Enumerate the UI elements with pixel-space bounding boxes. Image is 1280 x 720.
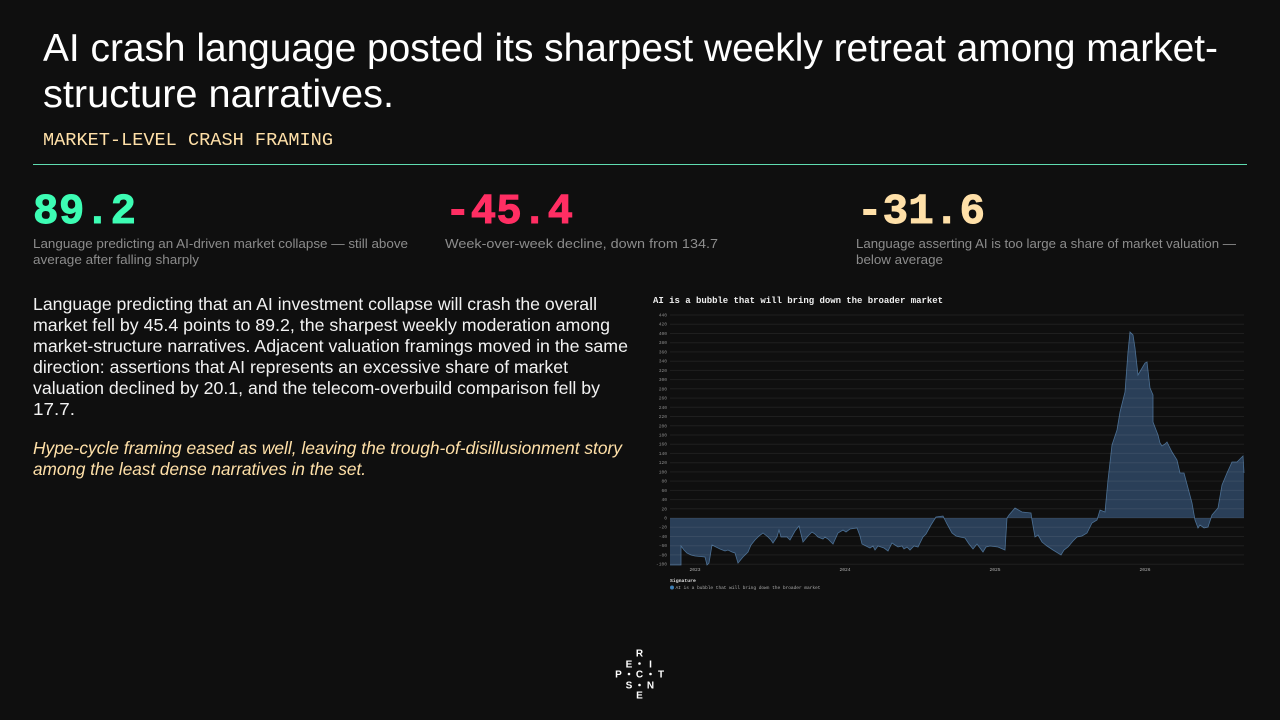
y axis labels (656, 312, 667, 568)
stat: -31.6: -31.6 (857, 188, 985, 236)
stat: -31.6 (856, 188, 1236, 267)
logo: letter cross: I (649, 660, 652, 670)
italic takeaway (33, 438, 623, 479)
y axis labels: 280 (659, 386, 667, 392)
stat: -31.6: Language asserting AI is too large a share of market valuation — (856, 236, 1236, 251)
chart title: AI is a bubble that will bring down the broader market (653, 296, 943, 306)
y axis labels: 240 (659, 405, 667, 411)
stat: 89.2: 89.2 (33, 188, 136, 236)
y axis labels: 80 (661, 479, 667, 485)
body paragraph: valuation declined by 20.1, and the telecom-overbuild comparison fell by (33, 378, 600, 398)
body paragraph: market-structure narratives. Adjacent valuation framings moved in the same (33, 336, 628, 356)
y axis labels: 440 (659, 312, 667, 318)
x axis labels: 2026 (1139, 567, 1151, 573)
stat: -45.4: -45.4 (445, 188, 573, 236)
subtitle: MARKET-LEVEL CRASH FRAMING (43, 130, 333, 151)
body paragraph: market fell by 45.4 points to 89.2, the sharpest weekly moderation among (33, 315, 610, 335)
logo: letter cross: C (636, 670, 643, 680)
x axis labels (689, 567, 1151, 573)
stat: -31.6: below average (856, 252, 943, 267)
y axis labels: 0 (664, 516, 667, 522)
stat: -45.4 (445, 188, 718, 251)
y axis labels: 100 (659, 469, 667, 475)
y axis labels: 360 (659, 349, 667, 355)
y axis labels: 60 (661, 488, 667, 494)
title: AI crash language posted its sharpest weekly retreat among market- (43, 27, 1218, 70)
logo: letter cross: N (647, 680, 654, 692)
y axis labels: 160 (659, 442, 667, 448)
stat: 89.2: average after falling sharply (33, 252, 200, 267)
legend: Signature (670, 578, 696, 584)
body paragraph: 17.7. (33, 399, 75, 419)
y axis labels: 140 (659, 451, 667, 457)
italic takeaway: among the least dense narratives in the set. (33, 459, 366, 479)
body paragraph (33, 294, 628, 419)
stat: 89.2: Language predicting an AI-driven market collapse — still above (33, 236, 408, 251)
stat: 89.2 (33, 188, 408, 267)
y axis labels: 180 (659, 432, 667, 438)
x axis labels: 2023 (689, 567, 701, 573)
y axis labels: -80 (659, 552, 667, 558)
x axis labels: 2025 (989, 567, 1001, 573)
body paragraph: Language predicting that an AI investment collapse will crash the overall (33, 294, 597, 314)
y axis labels: 120 (659, 460, 667, 466)
y axis labels: 420 (659, 322, 667, 328)
y axis labels: 20 (661, 506, 667, 512)
y axis labels: -20 (659, 525, 667, 531)
stat: -45.4: Week-over-week decline, down from 134.7 (445, 236, 718, 251)
y axis labels: 220 (659, 414, 667, 420)
legend (670, 578, 821, 591)
logo: letter cross: R (636, 648, 644, 660)
body paragraph: direction: assertions that AI represents an excessive share of market (33, 357, 568, 377)
title: structure narratives. (43, 73, 394, 116)
legend: AI is a bubble that will bring down the broader market (676, 585, 821, 591)
y axis labels: 400 (659, 331, 667, 337)
y axis labels: 260 (659, 396, 667, 402)
y axis labels: 340 (659, 359, 667, 365)
y axis labels: -100 (656, 562, 667, 568)
italic takeaway: Hype-cycle framing eased as well, leaving the trough-of-disillusionment story (33, 438, 623, 458)
logo: letter cross: S (626, 680, 633, 692)
y axis labels: 300 (659, 377, 667, 383)
y axis labels: 40 (661, 497, 667, 503)
logo: letter cross: T (658, 670, 664, 680)
logo: letter cross: P (615, 670, 622, 680)
y axis labels: 380 (659, 340, 667, 346)
y axis labels: 320 (659, 368, 667, 374)
title (43, 27, 1218, 116)
logo: letter cross (615, 648, 664, 702)
area series (670, 332, 1244, 565)
logo: letter cross: E (636, 690, 643, 702)
y axis labels: -40 (659, 534, 667, 540)
logo: letter cross: E (626, 660, 633, 670)
y axis labels: 200 (659, 423, 667, 429)
x axis labels: 2024 (839, 567, 851, 573)
chart: area chart of signature over time (653, 296, 1244, 591)
y axis labels: -60 (659, 543, 667, 549)
